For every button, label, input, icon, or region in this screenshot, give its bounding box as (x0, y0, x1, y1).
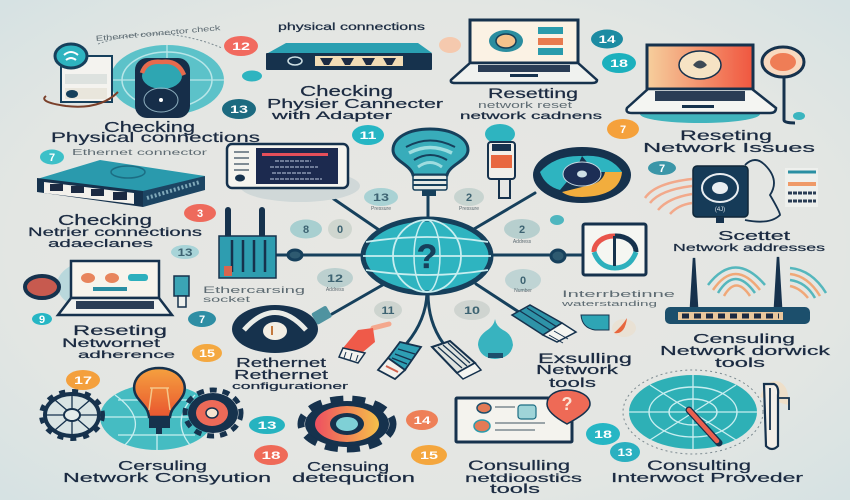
caption: internet settings: Interrbetinne (562, 289, 675, 299)
sub: data card (785, 168, 818, 207)
caption: consulting internet provider (611, 457, 804, 485)
caption: checking physical connector: Physier Cannecter (267, 96, 444, 111)
icon: red ethernet plug (339, 324, 389, 363)
caption: consulting netdiagnostics tools: netdioostics (465, 471, 582, 485)
caption: checking physical connections: Physical connections (51, 129, 260, 145)
sub: needle (689, 410, 719, 443)
caption: resetting network cadnens: network reset (478, 100, 573, 110)
caption: resetting network cadnens (460, 85, 602, 122)
number badges: 13 (230, 104, 248, 116)
caption: resetting network cadnens: network cadnens (460, 111, 602, 122)
number badges: 7 (199, 314, 205, 326)
panel: network configuration globe with bulb (41, 368, 241, 450)
panel: top router (266, 43, 432, 70)
sub: wifi badge (55, 44, 87, 68)
number badges: 18 (262, 450, 280, 462)
caption: consulting network configuration: Network Consyution (63, 470, 271, 485)
caption: resetting networnet adherence: Networnet (62, 336, 161, 350)
caption: ethernet cabling socket (203, 285, 305, 304)
sub: right gear (188, 393, 238, 433)
caption: consulting network dorwick tools: tools (715, 355, 766, 370)
number badges: Pressure (371, 206, 391, 212)
central globe hub: ? (417, 238, 437, 276)
caption: internet settings (560, 289, 675, 308)
panel: right adapter device: (4J) (715, 207, 725, 213)
caption: checking physical connector: with Adapter (270, 110, 393, 122)
caption: consulting internet provider: Interwoct Proveder (611, 470, 804, 485)
caption: consulting network configuration (63, 458, 271, 485)
caption: exsulling network tools (536, 350, 632, 390)
caption: consuing detection: detequction (292, 470, 415, 485)
caption: consuing detection: Censuing (307, 459, 389, 474)
caption: resetting network cadnens: Resetting (488, 85, 578, 101)
sub: left gear (45, 394, 99, 436)
number badges: 11 (360, 130, 376, 142)
number badges: 13 (373, 192, 389, 204)
number badges (32, 30, 676, 465)
icon: gear pie chart (534, 148, 630, 202)
number badges: 15 (199, 348, 215, 360)
sub: probe tool (760, 381, 788, 405)
number badges: 13 (178, 247, 192, 259)
number badges: 12 (327, 273, 343, 285)
caption: rethernet configuration (232, 355, 348, 392)
hub connector spokes (277, 190, 585, 343)
caption: rethernet configuration: Rethernet (234, 367, 329, 382)
caption: reseting network issues (643, 127, 816, 155)
caption: consulting netdiagnostics tools: Consulling (468, 457, 570, 473)
panel: diagnostics tablet with pin: ? (562, 394, 572, 414)
sub: plug (174, 276, 189, 296)
number badges: 14 (414, 415, 432, 427)
caption: checking network connections: adaeclanes (48, 238, 154, 250)
caption: resetting networnet adherence (62, 322, 176, 361)
caption: consulting network dorwick tools: Network dorwick (660, 344, 831, 358)
number badges: 7 (49, 152, 55, 164)
caption: scettet network addresses: Network addresses (673, 243, 825, 254)
panel: radar globe (623, 370, 789, 454)
number badges: 10 (464, 305, 480, 317)
caption: rethernet configuration: Rethernet (236, 355, 327, 370)
panel: network switch (37, 160, 205, 207)
caption: consuing detection (292, 459, 415, 485)
icon: grey ethernet plug (432, 341, 481, 379)
caption: circular label top-left: Ethernet connector check (95, 23, 221, 43)
icon: central wifi light bulb (393, 129, 468, 196)
number badges: 0 (337, 224, 343, 236)
icon: large gear with colour ring (301, 399, 393, 449)
number badges: 0 (520, 275, 526, 287)
caption: checking network connections: Checking (58, 212, 152, 229)
caption: consulting network dorwick tools: Censuling (693, 331, 795, 346)
number badges: Address (513, 239, 532, 245)
number badges: Number (514, 288, 532, 294)
caption: reseting network issues: Reseting (680, 127, 772, 143)
panel: left laptop (25, 260, 189, 315)
caption: ethernet cabling socket: socket (203, 295, 252, 304)
number badges: 7 (659, 163, 665, 175)
icon: blue ethernet plug (378, 342, 421, 379)
caption: checking network connections (28, 212, 202, 250)
number badges: 9 (39, 314, 45, 326)
caption: rethernet configuration: configurationer (232, 381, 348, 392)
panel: top laptop (451, 20, 597, 83)
caption: consulting network dorwick tools (660, 331, 831, 370)
number badges: 14 (598, 34, 617, 46)
icon: teal ethernet connector (512, 305, 576, 343)
icon: antenna router left (219, 207, 276, 278)
number badges: 2 (519, 224, 525, 236)
caption: ethernet cabling socket: Ethercarsing (203, 285, 305, 295)
caption: internet settings: waterstanding (560, 301, 657, 308)
icon: speed dial (232, 305, 332, 353)
number badges: 18 (594, 429, 612, 441)
caption: scettet network addresses: Scettet (718, 228, 791, 243)
number badges: 3 (197, 208, 203, 220)
sub: phone card (61, 56, 112, 102)
number badges: 8 (303, 224, 309, 236)
number badges: 11 (382, 305, 394, 317)
caption: scettet network addresses (673, 228, 825, 254)
panel: diagnostic tablet (227, 144, 360, 202)
caption: checking network connections: Netrier connections (28, 225, 202, 239)
caption: consulting internet provider: Consulting (647, 457, 751, 473)
caption: exsulling network tools: Exsulling (538, 350, 632, 366)
number badges: 7 (620, 124, 626, 136)
panel: tablet chart (583, 224, 646, 275)
panel: right adapter device (645, 160, 818, 223)
panel: diagnostics tablet with pin (456, 390, 590, 442)
caption: consulting netdiagnostics tools (465, 457, 582, 496)
number badges: 15 (420, 450, 438, 462)
icon: dual antenna router (665, 257, 826, 324)
sub: cable (44, 92, 118, 107)
number badges: 12 (232, 41, 250, 53)
sub: dial unit (135, 58, 190, 118)
caption: consulting netdiagnostics tools: tools (490, 481, 541, 496)
caption: resetting networnet adherence: adherence (78, 350, 176, 361)
number badges: 13 (618, 447, 632, 459)
number badges: 18 (610, 58, 628, 70)
caption: exsulling network tools: tools (549, 375, 597, 390)
caption: consulting network configuration: Cersuling (118, 458, 207, 473)
sub: bulb (134, 368, 185, 417)
caption: resetting networnet adherence: Reseting (73, 322, 167, 338)
caption: reseting network issues: Network Issues (643, 140, 816, 155)
number badges: Address (326, 287, 345, 293)
caption: checking physical connector: Checking (300, 83, 393, 100)
central globe hub (363, 219, 491, 293)
sub: red badge (25, 276, 59, 298)
panel: top-left physical connection device (44, 34, 224, 118)
caption: checking physical connections (51, 119, 260, 157)
caption: checking physical connections: Ethernet connector (72, 148, 208, 157)
number badges: 13 (258, 420, 276, 432)
icon: blue coral widget (581, 315, 636, 337)
caption: exsulling network tools: Network (536, 362, 619, 377)
caption: physical connections top: physical connections (278, 22, 425, 33)
number badges: 17 (74, 375, 92, 387)
caption: checking physical connector (267, 83, 444, 122)
number badges: 2 (466, 192, 472, 204)
icon: USB adapter (485, 124, 515, 198)
icon: teal drop (478, 319, 513, 359)
caption: checking physical connections: Checking (104, 119, 195, 136)
panel: top-right laptop with magnifier (627, 45, 805, 123)
number badges: Pressure (459, 206, 479, 212)
